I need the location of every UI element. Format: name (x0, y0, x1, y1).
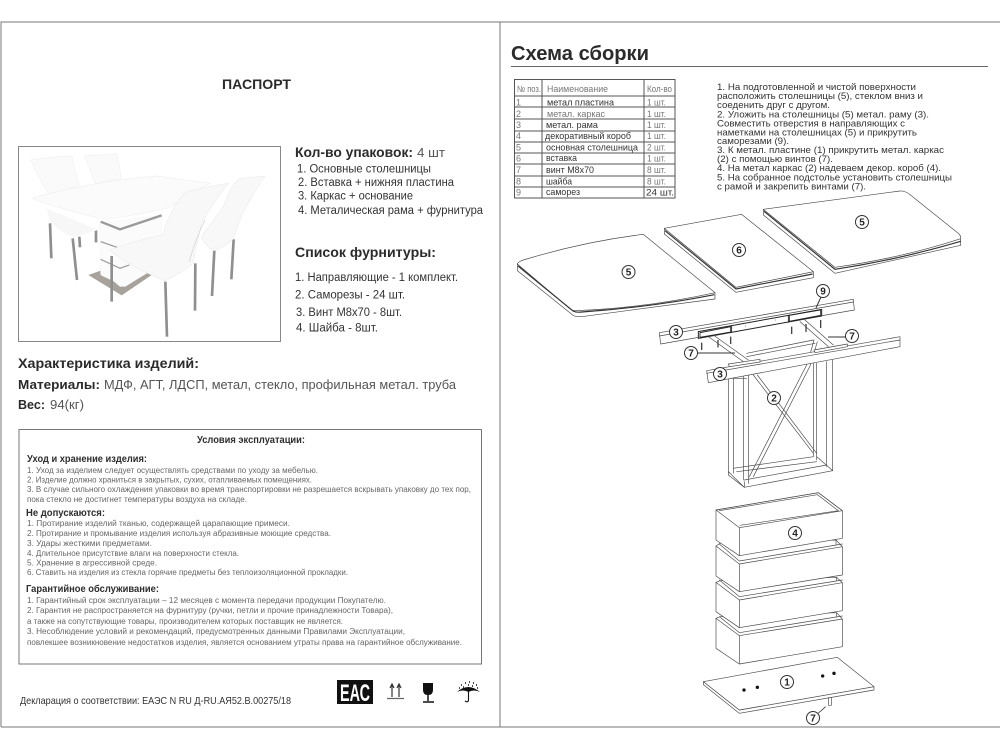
table: parts list: метал пластина (547, 98, 615, 108)
table: parts list: саморез (546, 187, 580, 198)
icon: fragile glass (423, 683, 434, 702)
panel: operating conditions: Не допускаются: (26, 508, 105, 519)
panel: operating conditions: 6. Ставить на изделия из стекла горячие предметы без теплоизоляционной прокладки. (27, 568, 348, 577)
table: parts list: 1 шт. (647, 109, 666, 119)
table: parts list: вставка (546, 153, 578, 164)
text block: assembly instructions: 3. К метал. пластине (1) прикрутить метал. каркас (717, 145, 944, 156)
table: parts list: 2 (516, 109, 521, 119)
icon: EAC mark: ЕАС (340, 680, 370, 707)
text block: hardware list: 3. Винт М8х70 - 8шт. (296, 307, 402, 319)
diagram: table top left part 5 (517, 234, 715, 317)
text block: assembly instructions: 2. Уложить на столешницы (5) метал. раму (3). (717, 110, 929, 120)
text block: assembly instructions: 1. На подготовленной и чистой поверхности (717, 82, 916, 93)
text block: product characteristics: Характеристика изделий: (18, 355, 199, 371)
text block: product characteristics: 94(кг) (50, 398, 84, 412)
photo: table and chairs (18, 146, 280, 342)
text block: packages: 1. Основные столешницы (297, 164, 431, 176)
text block: hardware list: 1. Направляющие - 1 комплект. (295, 272, 458, 284)
table: parts list: 6 (516, 154, 521, 164)
diagram: metal plate part 1: 1 (784, 678, 790, 688)
text block: product characteristics: МДФ, АГТ, ЛДСП, метал, стекло, профильная метал. труба (104, 378, 456, 392)
text block: product characteristics (18, 355, 456, 412)
panel: assembly scheme (511, 43, 988, 724)
panel: operating conditions: 1. Протирание изделий тканью, содержащей царапающие примеси. (27, 519, 290, 528)
panel: passport (18, 76, 484, 707)
panel: operating conditions: 3. Удары жесткими предметами. (27, 539, 152, 548)
callout: part 3 lower (714, 368, 726, 380)
table: parts list: 3 (516, 120, 521, 130)
panel: operating conditions: 3. В случае сильного охлаждения упаковки во время транспортировки не разрешается вскрывать упаковку до тех пор, (27, 485, 471, 494)
panel: operating conditions: Гарантийное обслуживание: (26, 583, 159, 595)
callout: part 3 lower: 3 (717, 370, 723, 380)
panel: operating conditions: Уход и хранение изделия: (27, 454, 147, 465)
callout: screw 7 bottom (806, 712, 820, 724)
panel: operating conditions: а также на сопутствующие товары, производителем которых поставщик не является. (27, 617, 343, 626)
callout: self-tapping screw 9: 9 (820, 286, 826, 298)
table: parts list: № поз. (517, 84, 541, 94)
text block: hardware list (295, 244, 458, 334)
panel: operating conditions: Условия эксплуатации: (197, 435, 305, 446)
table: parts list: 1 шт. (647, 131, 666, 141)
panel: operating conditions: повлекшее возникновение недостатков изделия, является основанием утраты права на гарантийное обслуживание. (27, 638, 462, 647)
diagram: metal frame part 2 (728, 340, 833, 487)
text block: assembly instructions (717, 82, 952, 192)
diagram: metal frame part 2: 2 (771, 394, 777, 404)
table: parts list (514, 80, 675, 198)
table: parts list: декоративный короб (545, 131, 632, 142)
table: parts list: 7 (516, 165, 521, 175)
icon: this way up arrows (387, 684, 404, 698)
diagram: insert part 6: 6 (736, 246, 742, 256)
panel: operating conditions: 1. Уход за изделием следует осуществлять средствами по уходу за мебелью. (27, 466, 318, 475)
text block: assembly instructions: расположить столешницы (5), стеклом вниз и (717, 91, 923, 102)
icon: keep dry umbrella (457, 682, 480, 702)
callout: screw 7 left: 7 (688, 348, 694, 360)
text block: product characteristics: Вес: (18, 397, 45, 412)
text block: assembly instructions: Совместить отверстия в направляющих с (717, 118, 905, 130)
text block: packages: 3. Каркас + основание (298, 190, 413, 202)
panel: operating conditions: 5. Хранение в агрессивной среде. (27, 558, 157, 568)
diagram: metal rail frame part 3 (659, 284, 900, 383)
diagram: table top left part 5: 5 (626, 268, 632, 278)
panel: operating conditions: 1. Гарантийный срок эксплуатации – 12 месяцев с момента передачи продукции Покупателю. (27, 596, 386, 605)
text block: packages: 2. Вставка + нижняя пластина (298, 177, 455, 189)
text block: hardware list: Список фурнитуры: (295, 244, 436, 260)
table: parts list: 5 (516, 142, 521, 152)
table: parts list: 8 шт. (647, 165, 666, 175)
panel: operating conditions: 2. Изделие должно храниться в закрытых, сухих, отапливаемых помещениях. (27, 476, 312, 484)
table: parts list: 2 шт. (647, 142, 666, 152)
diagram: decorative box part 4: 4 (792, 528, 798, 540)
diagram: table top right part 5 (763, 191, 961, 273)
text block: assembly instructions: саморезами (9). (717, 136, 789, 147)
table: parts list: Наименование (547, 84, 608, 94)
diagram: decorative box part 4 (716, 493, 842, 664)
text block: hardware list: 2. Саморезы - 24 шт. (295, 290, 405, 302)
text block: product characteristics: Материалы: (18, 377, 100, 392)
table: parts list: метал. каркас (547, 109, 605, 119)
callout: part 3 upper: 3 (673, 328, 679, 338)
table: parts list: метал. рама (546, 120, 599, 131)
table: parts list: 1 шт. (647, 98, 666, 108)
text block: packages: 4. Металическая рама + фурнитура (298, 205, 484, 217)
text block: packages: 4 шт (417, 145, 445, 160)
text block: assembly instructions: (2) с помощью винтов (7). (717, 154, 833, 165)
text block: assembly instructions: 5. На собранное подстолье установить столешницы (717, 172, 952, 184)
panel: operating conditions: 2. Гарантия не распространяется на фурнитуру (ручки, петли и прочие принадлежности Товара), (27, 606, 393, 615)
icon: EAC mark (337, 680, 373, 707)
diagram: metal plate part 1 (703, 657, 874, 724)
heading: passport: ПАСПОРТ (222, 76, 291, 92)
callout: screw 7 right: 7 (849, 332, 855, 342)
callout: self-tapping screw 9 (816, 284, 830, 308)
table: parts list: 4 (516, 131, 521, 141)
callout: screw 7 left (684, 346, 735, 360)
table: parts list: винт М8х70 (546, 165, 594, 176)
table: parts list: шайба (546, 176, 573, 188)
text block: assembly instructions: соеденить друг с другом. (717, 100, 830, 111)
callout: screw 7 right (828, 330, 858, 342)
table: parts list: 8 шт. (647, 176, 666, 186)
callout: part 3 upper (670, 326, 682, 338)
text block: hardware list: 4. Шайба - 8шт. (296, 322, 378, 334)
panel: operating conditions: пока стекло не достигнет температуры воздуха на складе. (27, 495, 247, 504)
heading: assembly scheme: Схема сборки (511, 43, 649, 65)
text block: assembly instructions: с рамой и закрепить винтами (7). (717, 182, 866, 192)
panel: operating conditions: 3. Несоблюдение условий и рекомендаций, предусмотренных данными Правилами Эксплуатации, (27, 627, 405, 636)
declaration of conformity: Декларация о соответствии: ЕАЭС N RU Д-RU.АЯ52.В.00275/18 (20, 695, 291, 707)
table: parts list: основная столешница (546, 142, 639, 154)
table: parts list: Кол-во (647, 84, 672, 94)
table: parts list: 1 (516, 98, 521, 108)
text block: assembly instructions: наметками на столешницах (5) и прикрутить (717, 128, 917, 138)
text block: assembly instructions: 4. На метал каркас (2) надеваем декор. короб (4). (717, 163, 941, 174)
table: parts list: 9 (516, 188, 521, 198)
panel: operating conditions: 2. Протирание и промывание изделия используя абразивные моющие средства. (27, 529, 331, 538)
table: parts list: 1 шт. (647, 120, 666, 130)
table: parts list: 1 шт. (647, 154, 666, 164)
panel: operating conditions: 4. Длительное присутствие влаги на поверхности стекла. (27, 549, 239, 558)
text block: packages: Кол-во упаковок: (295, 144, 413, 160)
panel: operating conditions (19, 430, 482, 664)
diagram: insert part 6 (664, 214, 813, 292)
table: parts list: 24 шт. (646, 188, 674, 198)
table: parts list: 8 (516, 176, 521, 186)
diagram: table top right part 5: 5 (859, 218, 865, 228)
callout: screw 7 bottom: 7 (810, 714, 816, 724)
text block: packages (295, 144, 484, 217)
